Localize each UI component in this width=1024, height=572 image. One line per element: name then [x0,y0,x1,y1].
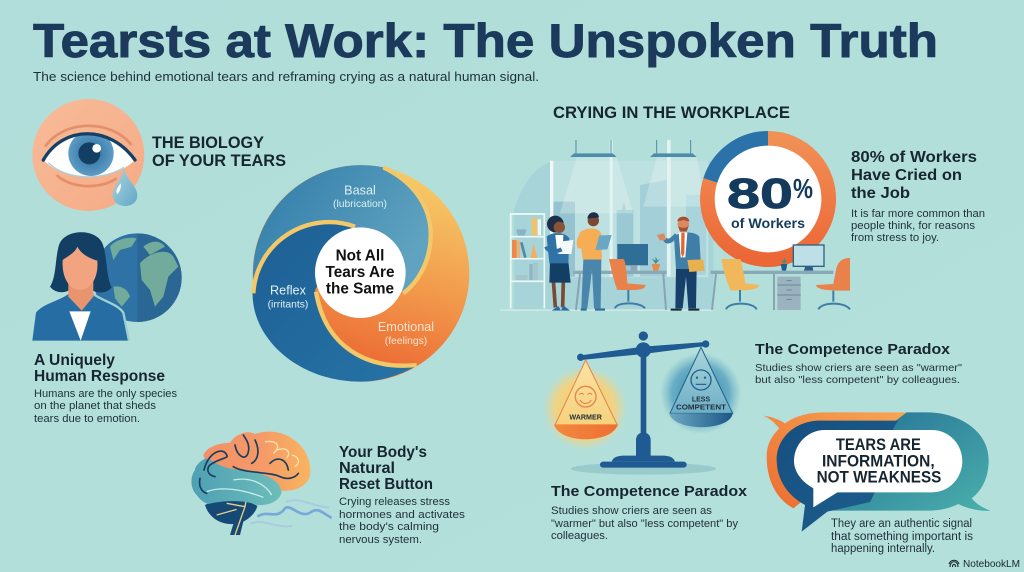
label: reflex: (irritants) [268,300,308,311]
left pan: warmer: WARMER [569,413,603,421]
center label [325,248,395,297]
text block: competence paradox lower: Studies show criers are seen as [551,505,713,517]
text block: your body's natural reset button: Crying releases stress [339,496,450,508]
callout text: NOT WEAKNESS [817,468,941,486]
donut caption: of Workers [731,216,805,231]
text block: your body's natural reset button: Natural [339,460,395,477]
icon: woman and globe [32,232,182,341]
text block: 80% of workers have cried on the job [851,149,985,244]
scale stand and beam [577,331,709,468]
desk right [711,245,850,310]
text block: 80% of workers have cried on the job: 80% of Workers [851,149,977,166]
title: Tearsts at Work: The Unspoken Truth [33,14,938,67]
icon: brain [191,432,331,535]
subtitle: The science behind emotional tears and reframing crying as a natural human signal. [33,70,539,84]
label: reflex: Reflex [270,284,307,298]
text block: your body's natural reset button: the body's calming [339,521,439,533]
left pan: warmer [554,360,618,439]
text block: competence paradox lower: colleagues. [551,530,608,542]
heading: the biology of your tears [152,134,286,170]
text block: 80% of workers have cried on the job: from stress to joy. [851,232,939,244]
text block: a uniquely human response: on the planet that sheds [34,400,157,412]
text block: competence paradox right: Studies show criers are seen as "warmer" [755,362,962,374]
center label: Not All [336,248,384,265]
text block: authentic signal: happening internally. [831,543,935,555]
callout: tears are information speech bubbles [763,412,991,532]
right pan: less competent [669,347,733,427]
woman colleague [546,216,573,311]
text block: competence paradox right: The Competence Paradox [755,341,951,358]
man gesturing [657,217,705,311]
text block: competence paradox lower: The Competence Paradox [551,483,748,500]
heading: crying in the workplace: CRYING IN THE WORKPLACE [553,104,790,122]
heading: the biology of your tears: THE BIOLOGY [152,134,264,152]
heading: the biology of your tears: OF YOUR TEARS [152,152,286,170]
donut percent sign: % [793,173,813,204]
text block: competence paradox lower [551,483,748,542]
text block: a uniquely human response: Human Response [34,368,165,385]
text block: authentic signal: They are an authentic signal [831,518,972,530]
icon: balance scale [543,331,741,475]
text block: 80% of workers have cried on the job: It is far more common than [851,208,985,220]
label: emotional [378,320,434,347]
text block: a uniquely human response: Humans are the only species [34,388,177,400]
callout text [817,436,941,486]
text block: authentic signal [831,518,973,555]
text block: your body's natural reset button: nervous system. [339,534,422,546]
right pan: less competent: COMPETENT [676,404,727,411]
center label: the Same [326,280,394,297]
label: reflex [268,284,308,311]
chart: 80 percent donut ring [707,138,829,260]
callout text: INFORMATION, [822,452,935,470]
text block: a uniquely human response: tears due to emotion. [34,413,140,425]
logo: NotebookLM: NotebookLM [963,559,1020,570]
right pan: less competent: LESS [692,396,710,403]
label: basal: (lubrication) [333,199,387,210]
text block: competence paradox right: but also "less competent" by colleagues. [755,374,960,386]
man with tablet [577,212,612,311]
text block: 80% of workers have cried on the job: people think, for reasons [851,220,976,232]
text block: competence paradox lower: "warmer" but also "less competent" by [551,518,738,530]
text block: a uniquely human response [34,352,177,425]
desk left [573,244,667,310]
bookshelf [511,214,544,308]
text block: a uniquely human response: A Uniquely [34,352,115,369]
text block: authentic signal: that something important is [831,531,973,543]
callout text: TEARS ARE [836,436,921,454]
label: basal: Basal [344,183,376,197]
text block: your body's natural reset button [339,444,466,546]
text block: your body's natural reset button: Reset Button [339,476,433,493]
illustration: office background [500,140,713,311]
label: basal [333,183,387,210]
label: emotional: Emotional [378,320,434,334]
icon: eye with tear [32,99,144,211]
text block: 80% of workers have cried on the job: Have Cried on [851,167,962,184]
center label: Tears Are [325,264,395,281]
text block: your body's natural reset button: hormones and activates [339,509,466,521]
donut value: 80 [727,170,793,218]
illustration: office furniture and people [511,212,850,311]
text block: your body's natural reset button: Your Body's [339,444,427,461]
text block: 80% of workers have cried on the job: the Job [851,185,910,202]
text block: competence paradox right [755,341,962,386]
chart: tear types swirl [253,165,469,382]
label: emotional: (feelings) [385,336,427,347]
